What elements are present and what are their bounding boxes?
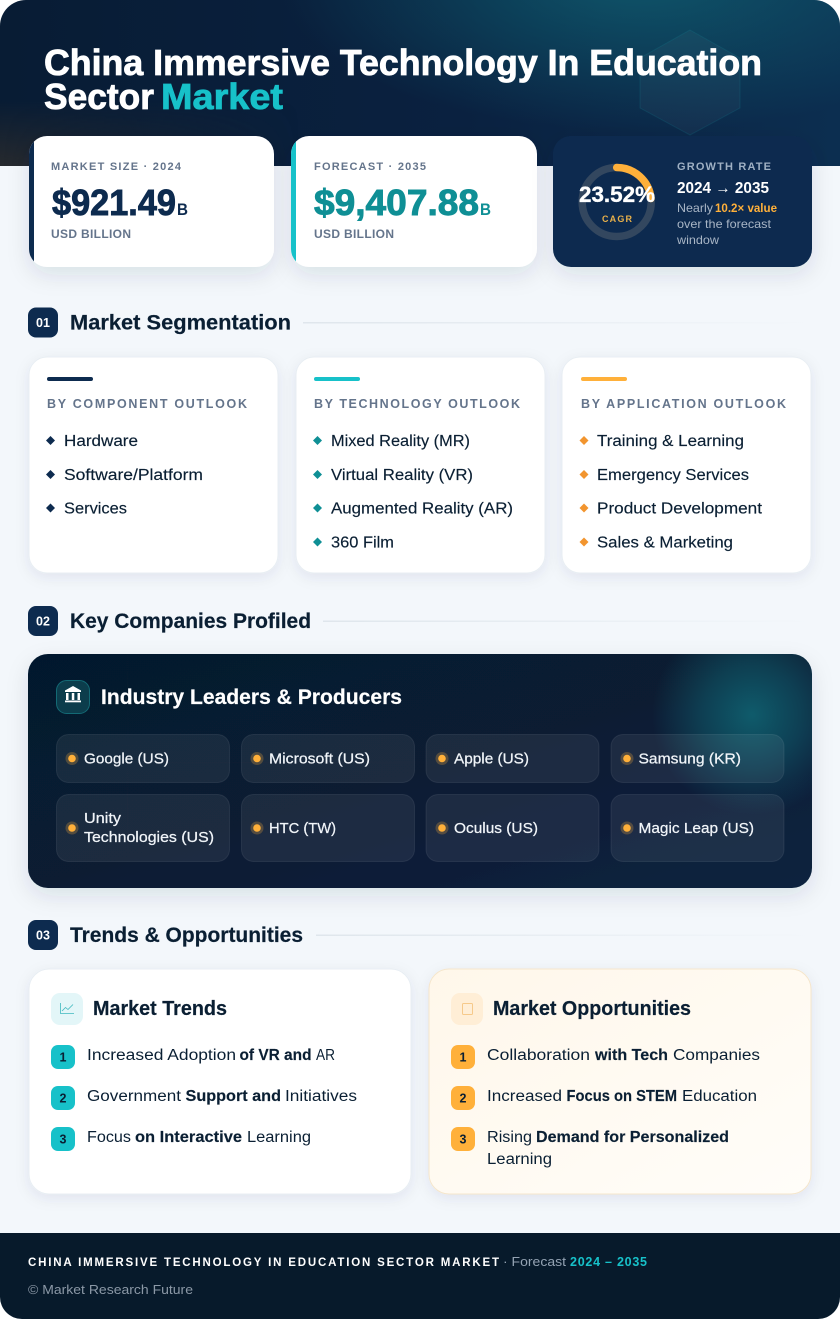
stat card: forecast: USD BILLION: [314, 227, 394, 241]
panel: market opportunities: Market Opportunities: [493, 998, 691, 1020]
opportunity 1: [451, 1045, 760, 1069]
trend 1: 1: [60, 1050, 67, 1064]
panel: industry leaders: [28, 654, 812, 888]
trend 2: Government: [87, 1088, 182, 1105]
opportunity 1: 1: [460, 1050, 467, 1064]
decorative hexagon: [640, 30, 740, 135]
panel: by component outlook: Hardware: [64, 433, 138, 450]
stat card: forecast: B: [480, 201, 491, 219]
section heading: trends and opportunities: 03: [36, 928, 50, 942]
stat card: forecast: FORECAST · 2035: [314, 161, 426, 173]
panel: by component outlook: BY COMPONENT OUTLOOK: [47, 397, 247, 411]
trend 3: Learning: [247, 1129, 311, 1146]
section heading: key companies: 02: [36, 614, 50, 628]
title: Sector: [44, 76, 154, 117]
CAGR ring: CAGR: [602, 214, 632, 224]
section heading: market segmentation: 01: [36, 316, 50, 330]
title: China Immersive Technology In Education: [44, 42, 762, 83]
opportunity 3: Rising: [487, 1129, 532, 1146]
panel: by application outlook: Product Development: [597, 500, 763, 518]
opportunity 3: [451, 1127, 729, 1168]
opportunity 1: with Tech: [594, 1047, 668, 1064]
section heading: key companies: Key Companies Profiled: [70, 609, 311, 633]
section heading: key companies: [28, 606, 614, 636]
stat card: market size: MARKET SIZE · 2024: [51, 161, 182, 173]
panel: by component outlook: Software/Platform: [64, 467, 203, 484]
trend 1: of VR and: [240, 1047, 312, 1064]
panel: by application outlook: BY APPLICATION OUTLOOK: [581, 397, 786, 411]
trend 3: 3: [60, 1132, 67, 1146]
trend 2: 2: [60, 1092, 67, 1106]
company chips: [56, 734, 784, 862]
trend 1: Increased Adoption: [87, 1047, 236, 1064]
trend 2: Support and: [186, 1088, 281, 1105]
panel: by application outlook: Sales & Marketing: [597, 534, 733, 552]
chip names: Unity: [84, 810, 122, 827]
icon: missing glyph box: [451, 993, 483, 1025]
header banner: [0, 0, 840, 166]
panel: by technology outlook: Augmented Reality (AR): [331, 500, 513, 518]
panel: market trends: Market Trends: [93, 998, 227, 1020]
footer: · Forecast: [503, 1255, 567, 1269]
chip names: Google (US): [84, 750, 169, 768]
panel: industry leaders: Industry Leaders & Producers: [101, 686, 402, 709]
chip names: Oculus (US): [454, 820, 538, 837]
growth text: 10.2× value: [715, 201, 777, 215]
panel: market opportunities: [429, 969, 811, 1194]
panel: by application outlook: Training & Learning: [597, 433, 744, 450]
growth text: over the forecast: [677, 217, 772, 231]
opportunity 1: Collaboration: [487, 1047, 590, 1064]
CAGR ring: 23.52%: [579, 182, 655, 207]
stat card: market size: $921.49: [52, 182, 176, 223]
panel: by application outlook: [562, 357, 811, 573]
opportunity 2: 2: [460, 1092, 467, 1106]
chip names: Microsoft (US): [269, 750, 370, 768]
icon: line chart: [51, 993, 83, 1025]
trend 2: Initiatives: [285, 1088, 357, 1105]
opportunity 1: Companies: [673, 1047, 760, 1064]
footer: 2024 – 2035: [570, 1255, 647, 1269]
panel: by technology outlook: 360 Film: [331, 534, 394, 552]
opportunity 3: 3: [460, 1132, 467, 1146]
panel: by application outlook: Emergency Services: [597, 467, 749, 484]
growth text: 2024 → 2035: [677, 180, 769, 197]
opportunity 3: Demand for Personalized: [536, 1129, 729, 1146]
trend 3: [51, 1127, 311, 1151]
opportunity 2: [451, 1086, 757, 1110]
chip names: [84, 750, 754, 846]
growth text: Nearly: [677, 201, 713, 215]
opportunity 2: Increased: [487, 1088, 562, 1105]
section heading: trends and opportunities: [28, 920, 612, 950]
panel: by technology outlook: Virtual Reality (VR): [331, 467, 473, 484]
panel: by component outlook: Services: [64, 500, 127, 518]
panel: market trends: [29, 969, 411, 1194]
stat card: market size: [29, 136, 274, 267]
section heading: market segmentation: [28, 308, 606, 338]
trend 3: Focus: [87, 1129, 131, 1146]
chip names: Samsung (KR): [638, 750, 741, 768]
footer: [0, 1233, 840, 1319]
panel: by component outlook: [29, 357, 278, 573]
chip dots: [66, 752, 634, 834]
stat card: forecast: [291, 136, 537, 267]
growth text: [676, 161, 777, 247]
stat card: market size: B: [177, 201, 188, 219]
opportunity 2: Focus on STEM: [566, 1088, 677, 1105]
CAGR ring: [579, 168, 655, 236]
opportunity 2: Education: [682, 1088, 757, 1105]
opportunity 3: Learning: [487, 1151, 552, 1168]
panel: by technology outlook: Mixed Reality (MR): [331, 433, 470, 450]
growth text: window: [676, 233, 719, 247]
title: Market: [161, 76, 283, 117]
section heading: market segmentation: Market Segmentation: [70, 310, 291, 334]
chip names: Technologies (US): [84, 829, 214, 846]
chip names: Apple (US): [454, 750, 529, 768]
stat card: growth rate: [553, 136, 812, 267]
icon: institution building: [56, 680, 90, 714]
title: [44, 48, 760, 110]
panel: by technology outlook: BY TECHNOLOGY OUTLOOK: [314, 397, 520, 411]
footer: © Market Research Future: [28, 1282, 193, 1297]
chip names: HTC (TW): [269, 820, 336, 837]
trend 3: on Interactive: [135, 1129, 242, 1146]
section heading: trends and opportunities: Trends & Opportunities: [70, 923, 303, 947]
trend 1: AR: [316, 1047, 335, 1064]
chip names: Magic Leap (US): [638, 820, 754, 837]
stat card: forecast: $9,407.88: [314, 182, 479, 223]
trend 2: [51, 1086, 357, 1110]
stat card: market size: USD BILLION: [51, 227, 131, 241]
growth text: GROWTH RATE: [677, 161, 771, 173]
footer: CHINA IMMERSIVE TECHNOLOGY IN EDUCATION SECTOR MARKET: [28, 1257, 499, 1269]
trend 1: [51, 1045, 335, 1069]
panel: by technology outlook: [296, 357, 545, 573]
